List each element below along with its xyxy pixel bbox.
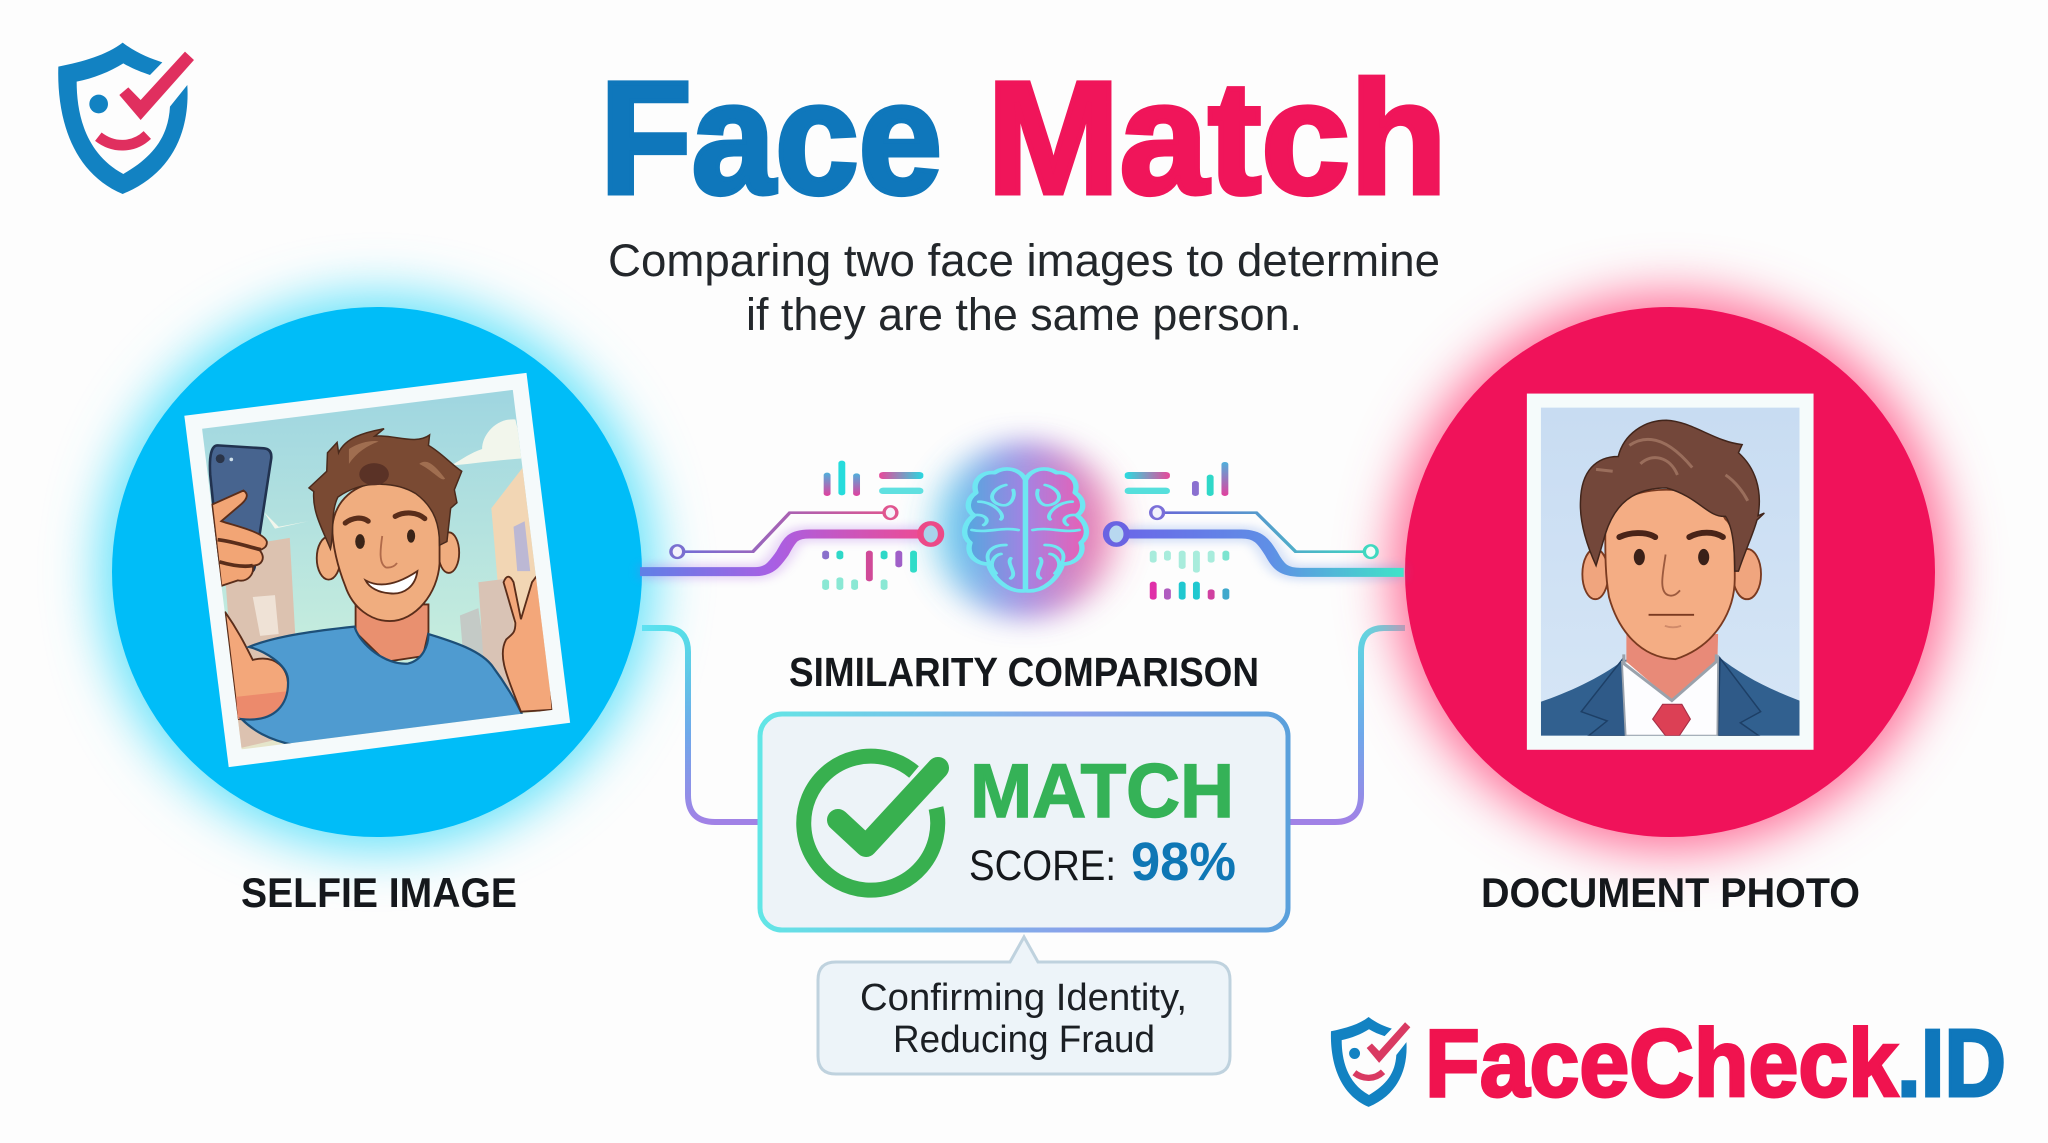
icon: shield logo top left [58,43,194,194]
callout: confirming identity [818,937,1230,1074]
panel: match result [760,714,1288,930]
left circuits [640,506,941,572]
brain glow [940,440,1111,620]
score label: SCORE: [969,842,1116,890]
icon: green check [804,756,938,890]
arm [225,612,288,719]
label: similarity comparison: SIMILARITY COMPARISON [789,649,1259,695]
right circuits [1106,506,1404,572]
callout: confirming identity: Reducing Fraud [893,1019,1155,1061]
peace hand [503,575,552,712]
document portrait [1527,394,1814,750]
title: Match [987,48,1447,227]
subtitle: if they are the same person. [746,289,1302,340]
label: document photo: DOCUMENT PHOTO [1481,869,1860,916]
match word: MATCH [970,749,1234,834]
diagram: similarity brain and circuits [640,440,1404,620]
subtitle [608,235,1440,340]
title: Face [600,48,942,227]
panel: selfie image circle [99,294,655,850]
wordmark: FaceCheck [1425,1010,1899,1117]
face [332,482,440,621]
ears [1582,549,1608,599]
phone [210,445,271,573]
icon: shield small [1331,1017,1410,1107]
title [600,48,1447,227]
hand holding phone [212,490,267,586]
brand logo: FaceCheck.ID [1331,1010,2006,1117]
left data bars [822,461,923,590]
panel: document photo circle [1392,294,1948,850]
icon: brain [965,469,1086,591]
subtitle: Comparing two face images to determine [608,235,1440,286]
suit [1541,656,1799,736]
label: selfie image: SELFIE IMAGE [241,869,517,916]
neck [356,604,428,662]
face [1605,490,1735,659]
facial features [345,518,368,523]
ears [317,537,340,580]
callout: confirming identity: Confirming Identity, [860,977,1187,1019]
hair [309,429,462,549]
connector: right circle to match box [1288,628,1405,822]
right data bars [1125,462,1229,600]
selfie photo [184,373,570,767]
hair [1580,420,1764,571]
brand logo: FaceCheck.ID: .ID [1897,1010,2006,1117]
score value: 98% [1131,832,1236,892]
shirt [242,627,523,745]
facial features [1619,533,1655,537]
connector: left circle to match box [642,628,760,822]
